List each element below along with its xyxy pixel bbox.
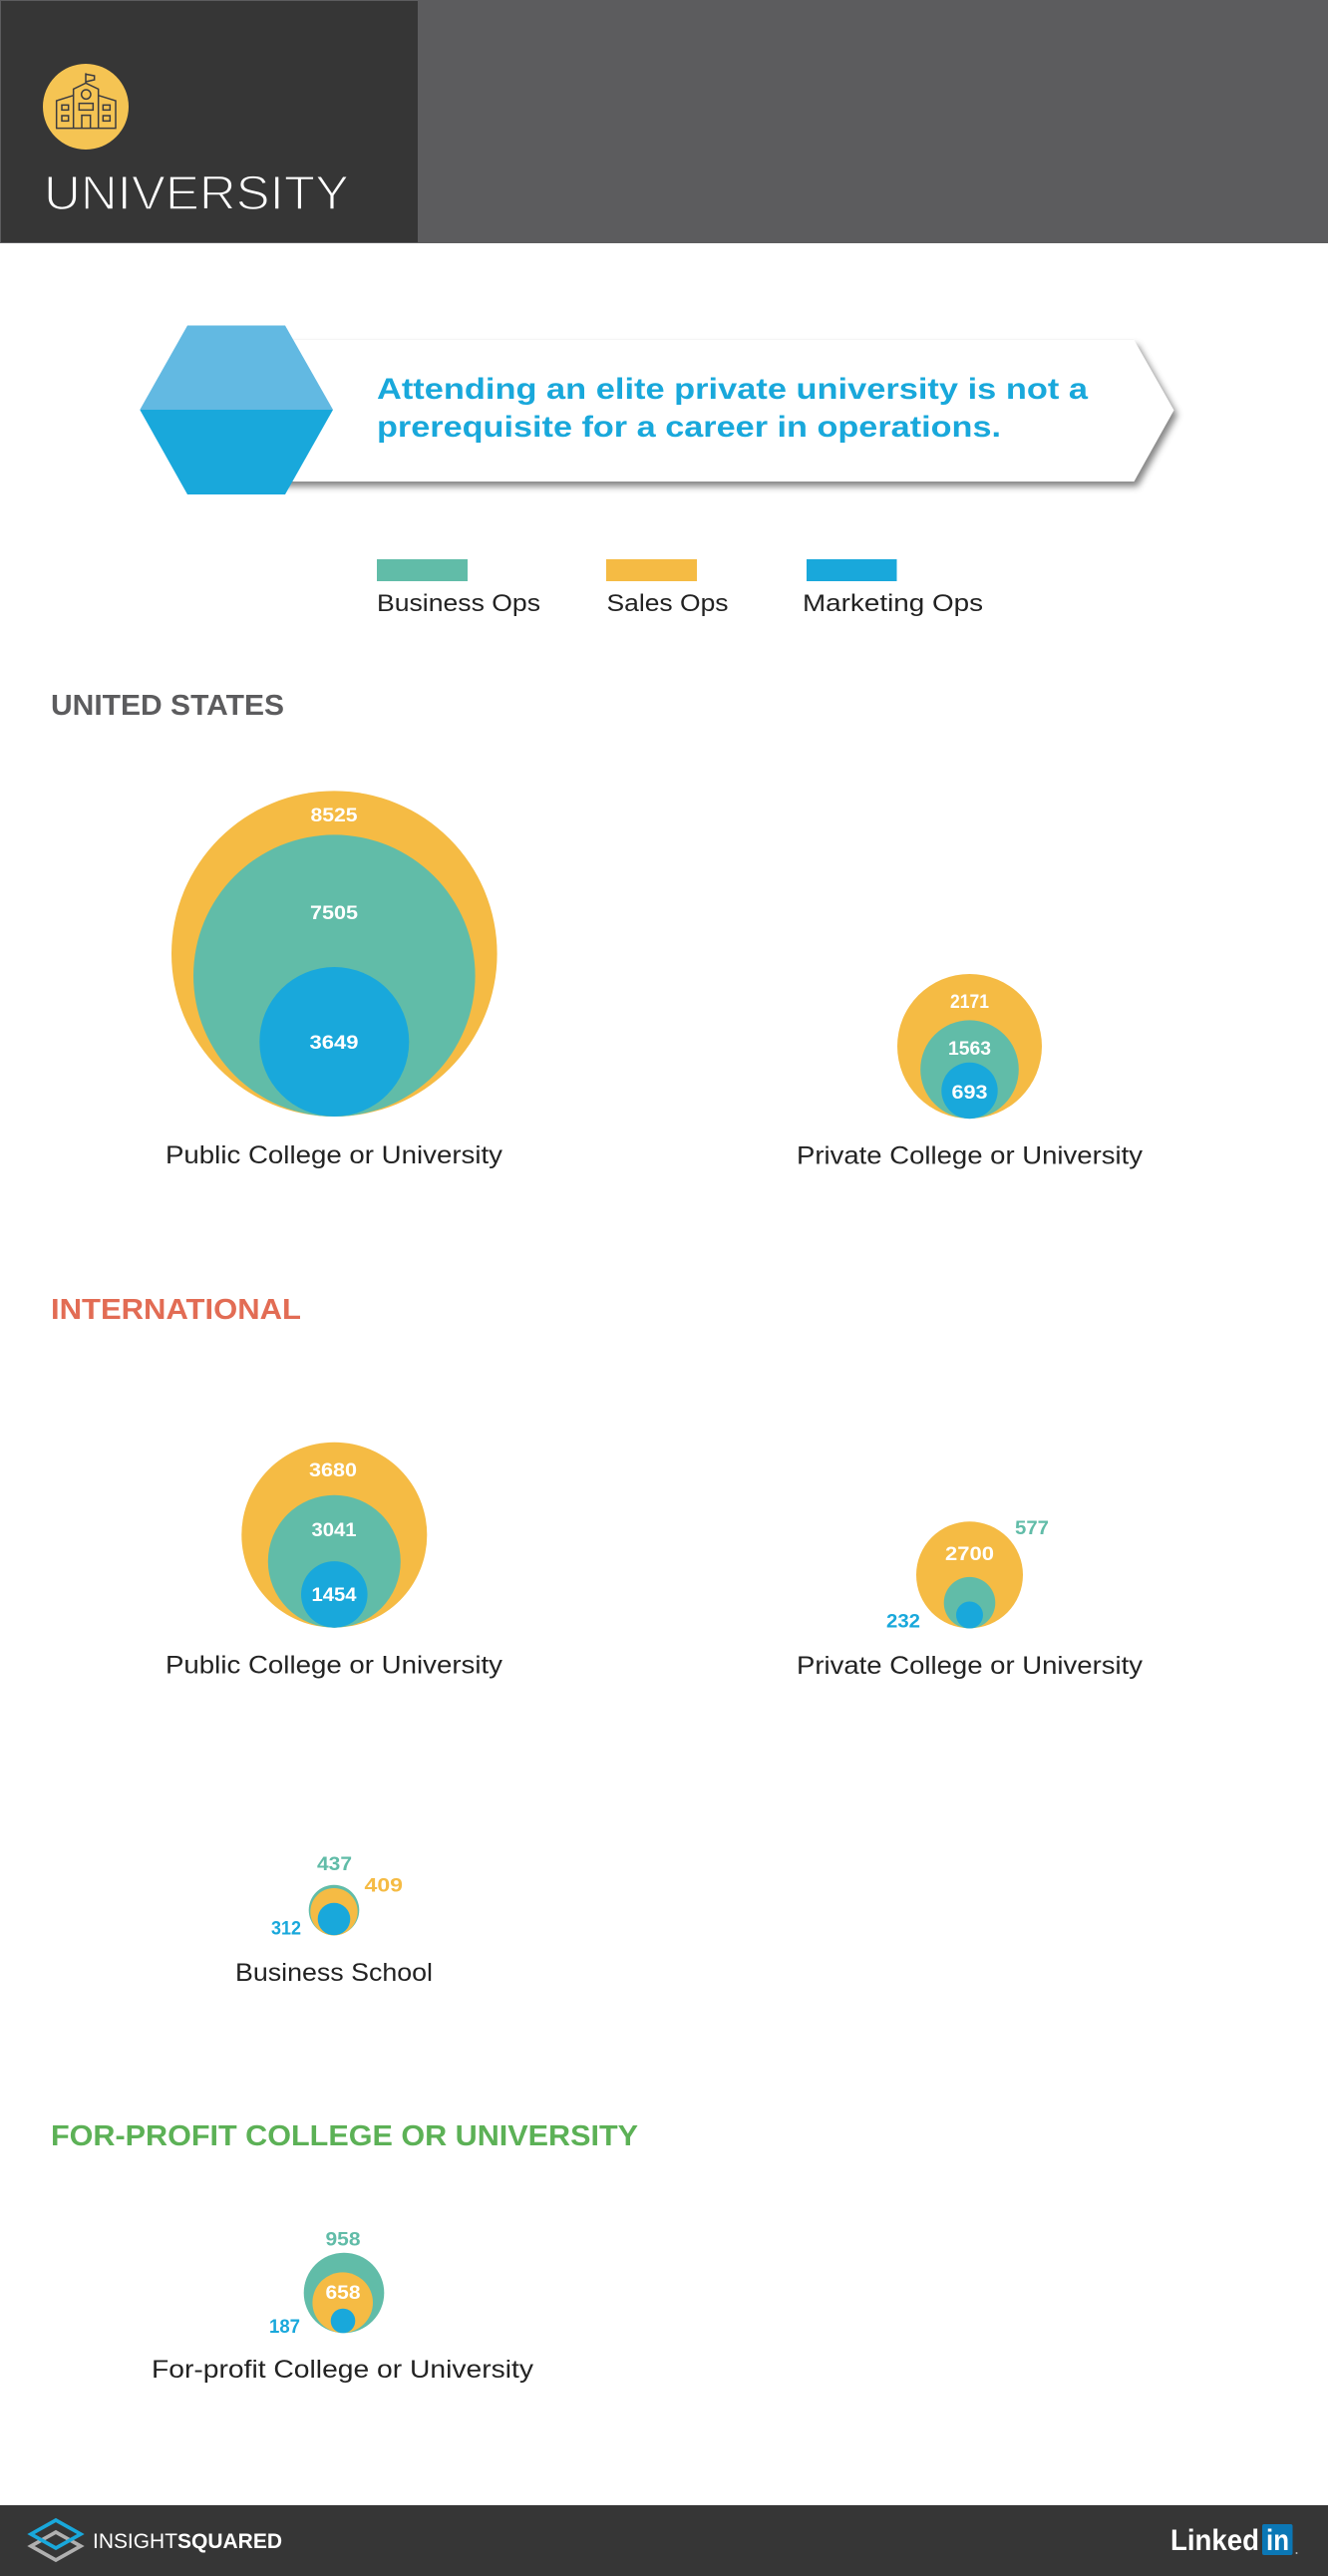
icon: InsightSquared logo (31, 2520, 81, 2560)
chart: For-profit: 658 (325, 2283, 361, 2304)
legend: Business Ops (377, 590, 540, 617)
callout text: Attending an elite private university is not a (377, 373, 1088, 406)
chart: International private: 577 (1015, 1518, 1049, 1539)
icon: hexagon (140, 325, 333, 494)
chart: US private: Private College or University (797, 1142, 1144, 1170)
chart: International private: 2700 (945, 1544, 994, 1565)
chart: US private: 1563 (948, 1039, 991, 1060)
callout text: prerequisite for a career in operations. (377, 411, 1001, 444)
chart: International public: 1454 (311, 1585, 357, 1606)
title: UNIVERSITY (44, 167, 349, 220)
legend: Marketing Ops (803, 590, 983, 617)
chart: International private: 232 (886, 1611, 920, 1633)
chart: For-profit: 187 (269, 2317, 300, 2338)
chart: International public: Public College or University (166, 1651, 503, 1679)
chart: US public: Public College or University (166, 1141, 503, 1169)
chart: US private: 2171 (950, 992, 989, 1013)
chart: US public: 3649 (309, 1033, 359, 1054)
callout banner (140, 325, 1177, 494)
chart: Business School: 409 (365, 1876, 403, 1896)
chart: Business School (235, 1854, 433, 1987)
heading: For-profit: FOR-PROFIT COLLEGE OR UNIVERSITY (51, 2120, 638, 2152)
chart: US public: 8525 (311, 805, 358, 826)
callout text (377, 373, 1088, 444)
chart: Business School: Business School (235, 1959, 433, 1987)
chart: US private: 693 (951, 1083, 987, 1104)
chart: International public: 3041 (311, 1520, 357, 1541)
panel: header band (0, 0, 1328, 243)
chart: International private: Private College or University (797, 1652, 1144, 1680)
chart: US public (166, 791, 503, 1169)
LinkedIn logo: Linked (1170, 2524, 1259, 2557)
legend: Sales Ops (606, 590, 728, 617)
chart: Business School: 437 (317, 1854, 352, 1875)
chart: For-profit: 958 (325, 2229, 361, 2251)
chart: Business School: 312 (271, 1918, 301, 1940)
heading: United States: UNITED STATES (51, 690, 284, 722)
chart: International public (166, 1443, 503, 1679)
InsightSquared wordmark: INSIGHTSQUARED (93, 2530, 282, 2553)
icon: school building (43, 64, 129, 150)
chart: International private (797, 1518, 1144, 1680)
panel: footer (0, 2505, 1328, 2576)
chart: International public: 3680 (309, 1460, 357, 1481)
chart: For-profit (152, 2229, 534, 2384)
LinkedIn logo: in (1266, 2524, 1289, 2557)
heading: International: INTERNATIONAL (51, 1294, 301, 1326)
legend (377, 559, 983, 617)
chart: US private (797, 974, 1144, 1170)
chart: US public: 7505 (310, 903, 358, 924)
chart: For-profit: For-profit College or University (152, 2356, 534, 2384)
